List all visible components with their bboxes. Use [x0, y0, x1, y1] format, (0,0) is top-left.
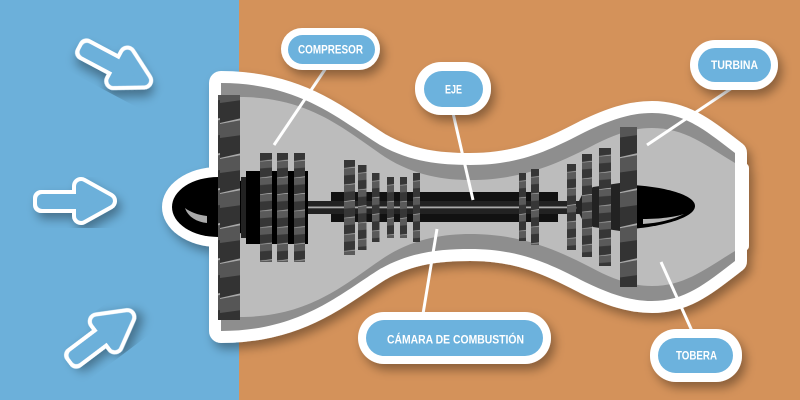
callout: tobera: [650, 262, 742, 382]
callout: compresor: COMPRESOR: [298, 44, 364, 56]
compressor hub: [241, 171, 308, 244]
arrow: middle air intake: [33, 186, 108, 216]
callout: eje: [415, 62, 491, 200]
front nose cone: [172, 177, 264, 237]
turbine blades: [519, 127, 637, 287]
arrow: top air intake: [71, 32, 151, 94]
rear nose cone: [630, 185, 695, 229]
compressor blades: [260, 153, 420, 262]
panel: orange background: [239, 0, 800, 400]
engine interior: [230, 97, 735, 317]
engine white outline: [162, 83, 749, 331]
callout: turbina: [647, 40, 778, 145]
callout: camara de combustion: CÁMARA DE COMBUSTIÓN: [387, 334, 524, 346]
shaft: [308, 192, 580, 222]
engine casing: [221, 83, 735, 331]
callout: eje: EJE: [445, 84, 462, 96]
arrow: bottom air intake: [58, 305, 136, 374]
fan blades: [218, 95, 240, 320]
callout: turbina: TURBINA: [711, 60, 758, 72]
callout: compresor: [274, 28, 380, 145]
callout: camara de combustion: [358, 229, 551, 364]
callout: tobera: TOBERA: [676, 350, 717, 362]
turbine hub: [576, 183, 620, 231]
panel: blue intake background: [0, 0, 239, 400]
